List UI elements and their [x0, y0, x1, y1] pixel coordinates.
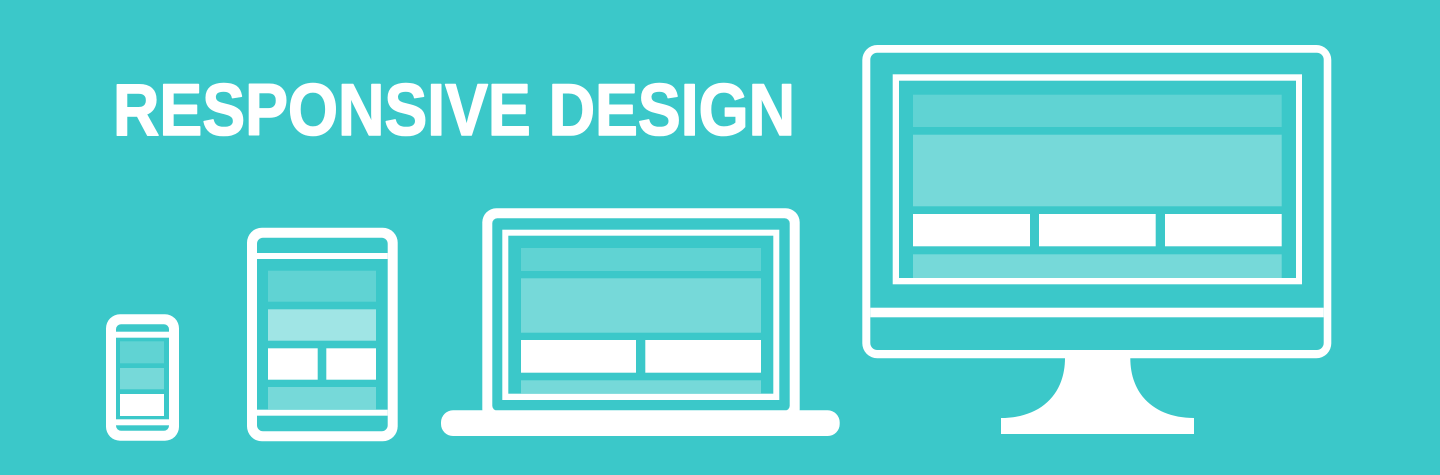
monitor content blocks	[913, 95, 1282, 278]
phone content blocks	[120, 341, 164, 416]
icon: laptop	[441, 208, 840, 436]
icon: desktop monitor	[862, 45, 1331, 434]
title: RESPONSIVE DESIGN	[113, 70, 795, 151]
laptop content blocks	[521, 248, 761, 394]
tablet content blocks	[268, 271, 376, 410]
icon: tablet	[247, 228, 398, 441]
laptop screen frame	[502, 230, 779, 400]
monitor stand	[1001, 350, 1194, 434]
monitor screen frame	[893, 74, 1302, 284]
icon: phone	[106, 314, 179, 441]
laptop base	[441, 410, 840, 436]
